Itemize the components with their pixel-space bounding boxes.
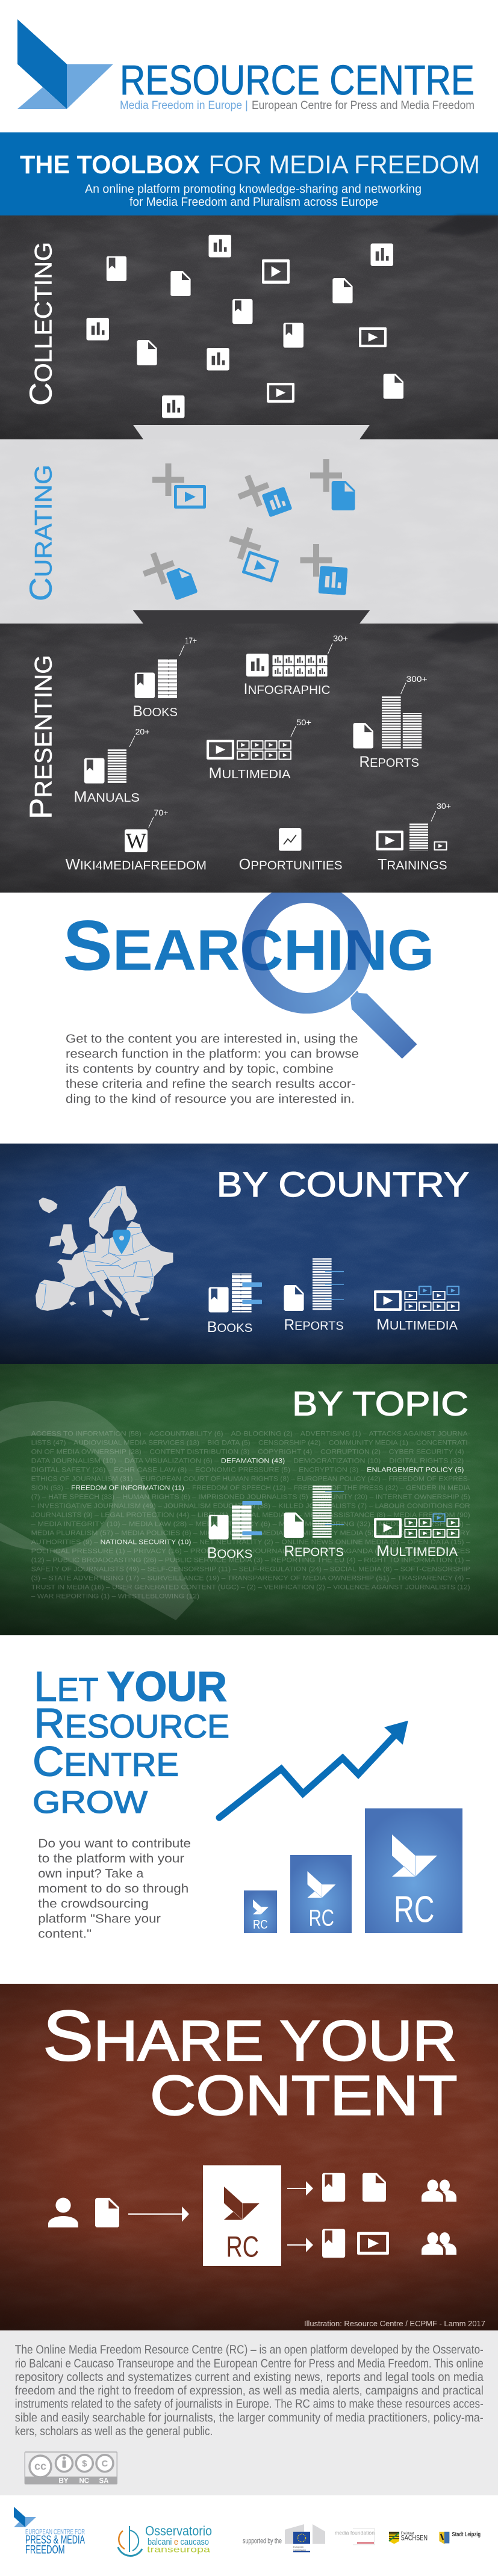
logo: European Centre for Press and Media Freedom: FREEDOM [25, 2544, 65, 2557]
subtitle: Media Freedom in Europe: Media Freedom in Europe [120, 99, 242, 112]
logo: Freistaat Sachsen: Freistaat [401, 2531, 414, 2536]
logo: Stadt Leipzig [439, 2531, 481, 2544]
item: reports by topic [284, 1485, 344, 1560]
text: topic list: (12) – PUBLIC BROADCASTING (26) – PUBLIC SERVICE MEDIA (3) – REPORTING THE EU (4) – RIGHT TO INFORMATION (1) – [31, 1557, 471, 1564]
panel: searching [65, 893, 431, 1105]
text: topic list: – INVESTIGATIVE JOURNALISM (49) – JOURNALISM EDUCATION (38) – KILLED JOURNALISTS (7) – LABOUR CONDITIONS FOR [31, 1503, 470, 1510]
logo: European Centre for Press and Media Freedom: EUROPEAN CENTRE FOR [25, 2528, 85, 2536]
funnel: collecting into curating [133, 425, 370, 439]
logo: Resource Centre bird [17, 19, 113, 109]
text: searching description: Get to the content you are interested in, using the [66, 1032, 358, 1046]
icon: contributor with document [48, 2198, 119, 2228]
text: contribute description: to the platform with your [38, 1851, 184, 1865]
text: illustration credit: Illustration: Resource Centre / ECPMF - Lamm 2017 [304, 2319, 485, 2328]
text: topic list: TRUST IN MEDIA (16) – USER GENERATED CONTENT (UGC) – (2) – VERIFICATION (2) – VIOLENCE AGAINST JOURNALISTS (12) [31, 1584, 470, 1591]
curated item: document [310, 459, 355, 510]
item: wiki4mediafreedom: WIKI4MEDIAFREEDOM [66, 856, 207, 873]
logo: European Commission: Commission [293, 2548, 306, 2551]
item: reports: 300+ [406, 674, 428, 684]
text: topic list: – MEDIA INTEGRITY (10) – MEDIA LAW (28) – MEDIA LITERACY (6) – MEDIA MONITORING (32) – MEDIA OWNERSHIP (5) – [31, 1521, 471, 1528]
logo: Media Foundation: media foundation [335, 2530, 375, 2536]
curated item: tilted document [138, 548, 198, 601]
text: banner description line 1: An online platform promoting knowledge-sharing and networking [85, 183, 422, 196]
panel: share your content [0, 1984, 498, 2330]
badge: creative commons BY NC SA: cc [34, 2460, 46, 2472]
text: topic list [31, 1431, 471, 1600]
item: reports by country [284, 1258, 344, 1334]
heading: Let your Resource Centre grow: CENTRE [33, 1738, 179, 1785]
heading: Share your content: CONTENT [150, 2064, 458, 2127]
map: Europe [36, 1186, 173, 1321]
badge: creative commons BY NC SA: C [102, 2459, 108, 2469]
text: contribute description [38, 1837, 191, 1940]
item: multimedia: 50+ [296, 717, 311, 727]
heading: Searching: SEARCHING [63, 906, 434, 986]
curated item: second chart [300, 544, 348, 595]
badge: creative commons BY NC SA: SA [99, 2477, 108, 2485]
panel: header [0, 0, 498, 132]
heading: The Toolbox for Media Freedom: THE TOOLBOX [20, 150, 200, 179]
panel: by country [0, 1144, 498, 1364]
badge: creative commons BY NC SA: NC [79, 2477, 89, 2485]
icons: scattered resources [87, 235, 403, 418]
text: contribute description: the crowdsourcing [38, 1897, 149, 1910]
item: infographic [243, 634, 348, 698]
icon: audience top [422, 2179, 456, 2202]
heading: Let your Resource Centre grow: RESOURCE [34, 1700, 229, 1747]
item: multimedia by country: MULTIMEDIA [376, 1316, 458, 1333]
text: searching description: these criteria and refine the search results accor- [66, 1077, 356, 1091]
item: reports: REPORTS [359, 754, 419, 770]
item: opportunities: OPPORTUNITIES [239, 856, 343, 873]
card: medium RC: RC [309, 1906, 334, 1931]
divider bar and organisation name: European Centre for Press and Media Freedom [252, 99, 475, 112]
panel: toolbox banner [0, 132, 498, 215]
panel: footer logos [0, 2495, 498, 2576]
text: topic list: JOURNALISTS (9) – LEGAL PROTECTION (44) – LIBEL (1) – LOCAL MEDIA (6) – MEDIA ASSISTANCE (8) – MEDIA FREEDOM (90) [31, 1512, 470, 1519]
text: about description [15, 2344, 484, 2438]
icons: top outputs [322, 2173, 386, 2202]
item: books by topic [207, 1501, 262, 1561]
logo: Osservatorio Balcani e Caucaso Transeuropa: balcani e caucaso [148, 2537, 209, 2547]
arrow: to bottom outputs [287, 2238, 313, 2252]
icons: bottom outputs [322, 2229, 389, 2258]
item: wiki4mediafreedom: 70+ [154, 808, 169, 817]
card: RC white [203, 2166, 281, 2266]
item: multimedia by country [374, 1286, 459, 1333]
watermark: large faded pin [0, 1401, 194, 1620]
panel: about [0, 2330, 498, 2495]
text: searching description: its contents by country and by topic, combine [66, 1062, 334, 1076]
item: trainings: 30+ [437, 801, 451, 811]
arrow: growth line [219, 1721, 408, 1818]
divider bar and organisation name: | [245, 99, 248, 112]
logo: Freistaat Sachsen: SACHSEN [401, 2534, 428, 2542]
logo: European Centre for Press and Media Freedom: PRESS & MEDIA [25, 2534, 85, 2547]
heading: Share your content: SHARE YOUR [43, 1996, 456, 2076]
item: reports [353, 674, 428, 770]
icon: magnifier ring [242, 882, 371, 1014]
panel: by topic [0, 1364, 498, 1635]
text: topic list: AUTHORITIES (9) – NATIONAL SECURITY (10) – NET NEUTRALITY (2) – ONLINE NEWS ONLINE MEDIA (9) – OPEN DATA (15) – [31, 1539, 471, 1546]
text: topic list: SAFETY OF JOURNALISTS (49) – SELF-CENSORSHIP (11) – SELF-REGULATION (24) – SOCIAL MEDIA (8) – SOFT-CENSORSHIP [31, 1566, 470, 1573]
logo: Stadt Leipzig: Stadt Leipzig [452, 2531, 481, 2538]
text: about description: kers, scholars as well as the general public. [15, 2425, 213, 2438]
panel: collecting [0, 215, 498, 439]
logo: European Commission [285, 2524, 325, 2552]
heading: Curating: CURATING [24, 465, 59, 601]
heading: Let your Resource Centre grow: GROW [33, 1785, 148, 1820]
item: books by country [207, 1274, 262, 1336]
text: banner description line 2: for Media Freedom and Pluralism across Europe [129, 196, 378, 209]
text: contribute description: Do you want to contribute [38, 1837, 191, 1851]
logo: Freistaat Sachsen [389, 2531, 428, 2544]
card: small RC [244, 1890, 277, 1933]
heading: Presenting: PRESENTING [24, 655, 59, 819]
item: books: BOOKS [132, 703, 178, 720]
text: topic list: POLITICAL PRESSURE (1) – PRIVACY (16) – PROFESSIONAL JOURNALISM (4) – PROPAGANDA (7) – PUBLIC RESOURCES [31, 1548, 470, 1555]
item: wiki4mediafreedom: W [126, 829, 146, 853]
text: topic list: MEDIA PLURALISM (57) – MEDIA POLICIES (6) – MIGRATION AND MEDIA (3) – MINORITY MEDIA (5) – NATIONAL REGULATORY [31, 1530, 470, 1537]
card: RC white: RC [226, 2231, 259, 2263]
item: manuals [73, 727, 149, 805]
text: topic list: ETHICS OF JOURNALISM (31) – EUROPEAN COURT OF HUMAN RIGHTS (8) – EUROPEAN POLICY (42) – FREEDOM OF EXPRES- [31, 1476, 470, 1483]
text: contribute description: moment to do so through [38, 1881, 188, 1895]
badge: creative commons BY NC SA [25, 2451, 117, 2485]
card: large RC [365, 1808, 462, 1933]
funnel: curating into presenting [133, 610, 370, 624]
panel: curating [0, 425, 498, 624]
item: books [132, 636, 197, 720]
item: reports by country: REPORTS [284, 1317, 344, 1334]
logo: European Commission: European [293, 2545, 303, 2548]
text: contribute description: platform "Share your [38, 1912, 161, 1925]
card: large RC: RC [394, 1889, 435, 1931]
item: trainings [376, 801, 451, 873]
curated item: chart [232, 470, 293, 518]
text: topic list: (3) – STATE ADVERTISING (17) – SURVEILLANCE (19) – TRANSPARENCY OF MEDIA OWNERSHIP (51) – TRASPARENCY (4) – [31, 1575, 471, 1582]
arrow: into Resource Centre [128, 2206, 189, 2222]
heading: Let your Resource Centre grow [33, 1663, 229, 1820]
item: books by topic: BOOKS [207, 1544, 252, 1561]
logo: Osservatorio Balcani e Caucaso Transeuropa: transeuropa [147, 2545, 210, 2554]
item: reports by topic: REPORTS [284, 1543, 344, 1560]
heading: Collecting: COLLECTING [24, 242, 59, 406]
text: topic list: DATA JOURNALISM (10) – DATA VISUALIZATION (6) – DEFAMATION (43) – DEMOCRATIZATION (10) – DIGITAL RIGHTS (32) – [31, 1458, 471, 1465]
logo: European Centre for Press and Media Freedom [14, 2507, 85, 2557]
text: contribute description: content." [38, 1927, 92, 1940]
heading: By Country: BY COUNTRY [217, 1165, 470, 1204]
text: topic list: – WAR REPORTING (1) – WHISTLEBLOWING (12) [31, 1593, 199, 1600]
heading: Share your content [43, 1996, 458, 2127]
icon: map pin [113, 1230, 131, 1254]
item: infographic: 30+ [333, 634, 348, 643]
text: topic list: ON OF MEDIA OWNERSHIP (28) – CONTENT DISTRIBUTION (3) – COPYRIGHT (4) – CORRUPTION (2) – CYBER SECURITY (4) – [31, 1449, 471, 1456]
card: medium RC [290, 1855, 352, 1933]
text: searching description: research function in the platform: you can browse [66, 1047, 359, 1061]
item: opportunities [239, 828, 343, 873]
arrow: to top outputs [287, 2181, 313, 2196]
item: infographic: INFOGRAPHIC [243, 681, 331, 698]
logo: Osservatorio Balcani e Caucaso Transeuropa: Osservatorio [145, 2524, 212, 2539]
badge: creative commons BY NC SA: BY [59, 2477, 69, 2485]
heading: By Topic: BY TOPIC [292, 1385, 468, 1423]
heading: Let your Resource Centre grow: LET YOUR [34, 1663, 227, 1710]
badge: creative commons BY NC SA: $ [82, 2459, 87, 2469]
text: searching description: ding to the kind of resource you are interested in. [66, 1092, 355, 1106]
text: searching description [66, 1032, 359, 1106]
item: multimedia [207, 717, 311, 782]
item: multimedia by topic: MULTIMEDIA [376, 1543, 458, 1559]
card: small RC: RC [253, 1918, 268, 1932]
heading: The Toolbox for Media Freedom: FOR MEDIA FREEDOM [208, 150, 480, 179]
text: topic list: SION (53) – FREEDOM OF INFORMATION (11) – FREEDOM OF SPEECH (12) – FREEDOM OF THE PRESS (32) – GENDER IN MEDIA [31, 1485, 470, 1492]
item: manuals: 20+ [135, 727, 149, 737]
item: trainings: TRAININGS [378, 856, 447, 873]
text: contribute description: own input? Take a [38, 1867, 144, 1880]
curated item: video [152, 463, 206, 509]
logo: Osservatorio Balcani e Caucaso Transeuropa [118, 2524, 212, 2556]
item: books by country: BOOKS [207, 1319, 252, 1336]
magnifier overlap tint [242, 882, 371, 1014]
icon: audience bottom [422, 2232, 456, 2255]
item: multimedia by topic [374, 1513, 459, 1559]
item: manuals: MANUALS [73, 788, 140, 805]
icon: magnifier handle [350, 991, 417, 1059]
item: multimedia: MULTIMEDIA [208, 765, 291, 782]
text: topic list: LISTS (47) – AUDIOVISUAL MEDIA SERVICES (13) – BIG DATA (5) – CENSORSHIP (42) – COMMUNITY MEDIA (1) – CONCENTRATI- [31, 1440, 470, 1447]
curated item: tilted video [225, 523, 279, 583]
text: supported by the: supported by the [243, 2537, 282, 2545]
text: topic list: ACCESS TO INFORMATION (58) – ACCOUNTABILITY (6) – AD-BLOCKING (2) – ADVERTISING (1) – ATTACKS AGAINST JOURNA- [31, 1431, 470, 1438]
item: books: 17+ [185, 636, 197, 645]
panel: let your resource centre grow [0, 1635, 498, 1984]
item: wiki4mediafreedom [66, 808, 207, 873]
text: topic list: (7) – HATE SPEECH (33) – HUMAN RIGHTS (6) – IMPRISONED JOURNALISTS (5) – IMMUNITY (20) – INTERNET OWNERSHIP (5) [31, 1494, 470, 1501]
panel: presenting [0, 610, 498, 893]
logo: Media Foundation [335, 2528, 375, 2545]
text: topic list: DIGITAL SAFETY (26) – ECHR CASE-LAW (8) – ECONOMIC PRESSURE (5) – ENCRYPTION (3) – ENLARGEMENT POLICY (5) – [31, 1467, 471, 1474]
